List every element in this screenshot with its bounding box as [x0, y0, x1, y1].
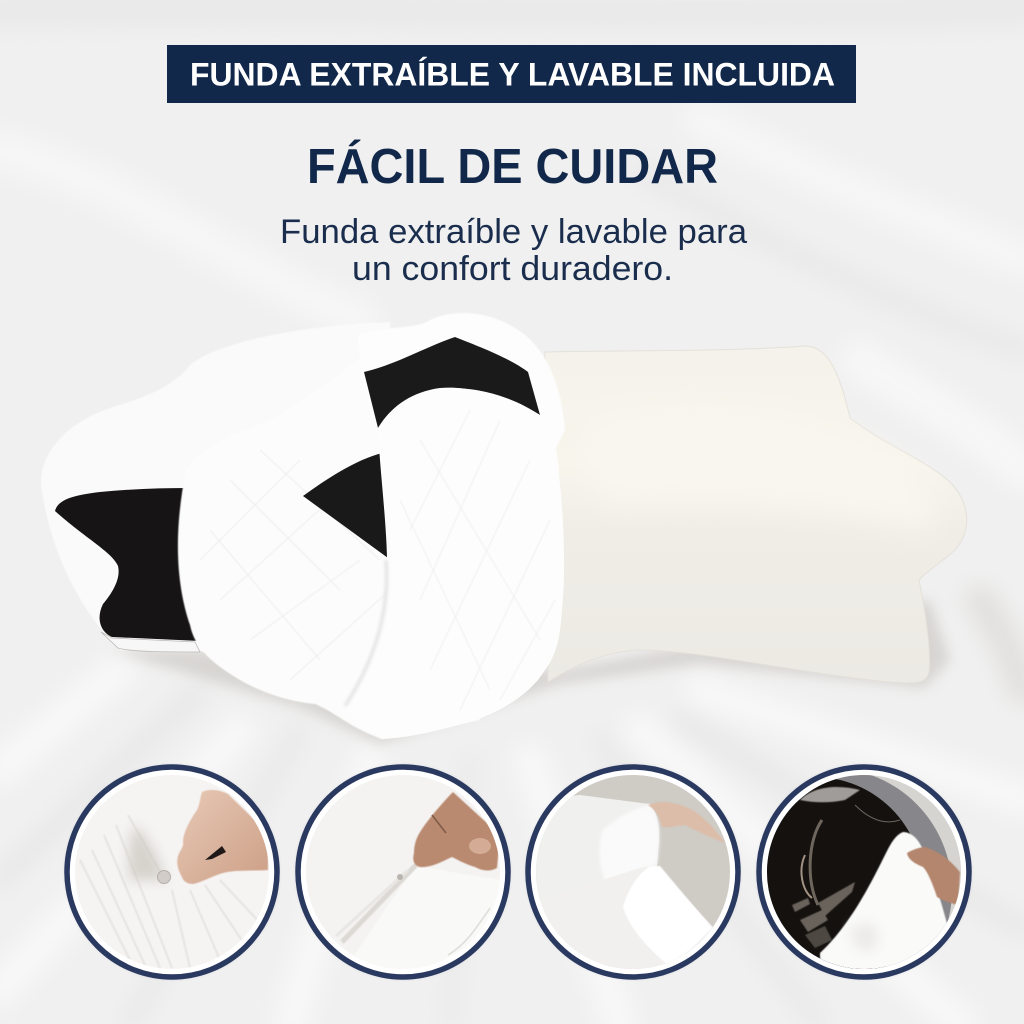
hand: [648, 802, 725, 843]
back of cover: [530, 795, 659, 905]
cover front fold: [345, 388, 564, 739]
cover back flap: [358, 313, 565, 450]
black panel inside cover triangle: [303, 453, 388, 558]
top banner: [167, 45, 856, 103]
drum ring: [767, 775, 952, 969]
detail circle 1: pressing snap button: [65, 765, 279, 979]
subtitle: un confort duradero.: [352, 250, 673, 288]
cover edge: [448, 908, 490, 955]
white cover held over drum: [820, 832, 952, 975]
subtitle: [280, 213, 747, 288]
black panel inside cover top: [364, 337, 540, 428]
zipper: [342, 865, 416, 942]
snap button: [158, 870, 170, 884]
pillow with partially removed cover: [41, 313, 967, 744]
detail circle 3: removing the cover: [526, 765, 740, 980]
hand: [177, 790, 268, 884]
fabric fold: [340, 866, 500, 976]
hand: [907, 847, 960, 905]
drum highlights: [801, 805, 900, 905]
drum paddles: [792, 882, 855, 948]
exposed cream pillow body: [545, 346, 967, 683]
black butterfly side panel: [55, 488, 200, 641]
white seam under black panel: [101, 632, 200, 652]
detail circle 2: opening zipper: [296, 765, 510, 979]
subtitle: Funda extraíble y lavable para: [280, 213, 747, 251]
title: FÁCIL DE CUIDAR: [307, 140, 718, 194]
zipper pull: [397, 874, 403, 880]
top door seal: [800, 787, 860, 802]
banner text: FUNDA EXTRAÍBLE Y LAVABLE INCLUIDA: [190, 56, 835, 92]
hand: [413, 792, 500, 871]
ribbed fabric: [80, 815, 262, 968]
drum interior: [767, 779, 910, 969]
fabric dimple shading: [129, 825, 165, 880]
white pillow left end: [41, 322, 400, 652]
pillow shadow: [110, 600, 950, 744]
front flap: [623, 866, 712, 965]
detail circle 4: washing machine: [756, 764, 972, 980]
lifted flap: [599, 805, 659, 882]
fan of sheet folds below the pillow: [0, 670, 120, 770]
lower cover: [542, 866, 713, 969]
lit top surface: [588, 405, 934, 530]
quilted cover outer fold: [178, 340, 480, 739]
cover shading lines: [200, 450, 390, 680]
